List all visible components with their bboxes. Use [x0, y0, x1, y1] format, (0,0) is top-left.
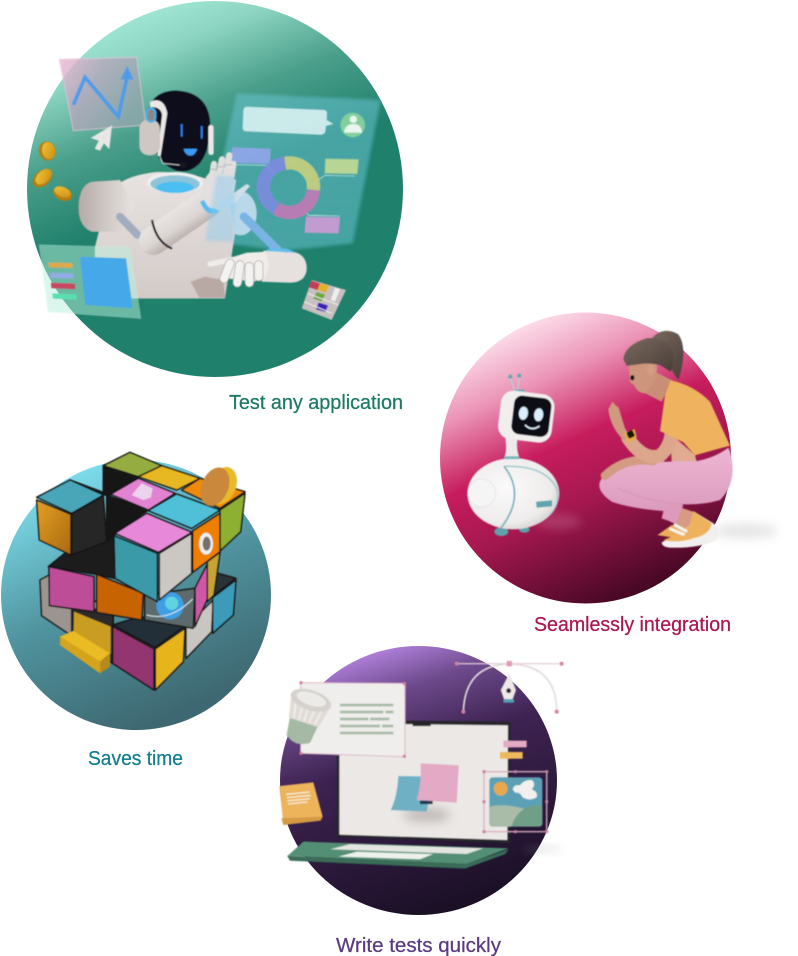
neck: [504, 438, 519, 458]
ponytail: [652, 331, 683, 380]
back shoe: [657, 525, 687, 538]
avatar: [340, 113, 365, 137]
right shoulder: [225, 191, 257, 235]
headset: [139, 100, 214, 168]
circle: write tests quickly: [280, 646, 557, 915]
circle: test any application: [27, 1, 403, 377]
antennae: [508, 374, 525, 392]
icon: orange note: [279, 782, 323, 825]
torso: [94, 172, 235, 298]
icon: coin in slot: [195, 463, 242, 510]
raised forearm: [153, 204, 207, 241]
lower hand: [210, 252, 268, 283]
bottom layer: [40, 572, 236, 690]
illustration: robot meets woman: [467, 331, 778, 548]
caption: test any application: Test any application: [229, 392, 403, 414]
illustration: robot with dashboards: [29, 57, 381, 320]
small robot: [467, 374, 582, 536]
illustration: laptop workspace: [277, 661, 564, 869]
far forearm: [605, 460, 653, 476]
donut chart: [263, 163, 314, 212]
lower leg: [670, 505, 699, 532]
body ball: [467, 458, 559, 529]
laptop screen: [337, 720, 511, 843]
icon: keypad: [302, 280, 346, 320]
head: [497, 389, 556, 444]
lower forearm: [262, 251, 307, 283]
middle layer: [48, 533, 220, 628]
raised hand: [199, 155, 250, 214]
speech bubble: [243, 107, 333, 135]
tag chips: [500, 741, 527, 759]
floor shadow: [712, 523, 778, 539]
translucent panel overlay: [205, 175, 235, 242]
ear: [647, 365, 655, 375]
torso shadow: [191, 277, 225, 298]
shirt: [660, 380, 730, 455]
caption: seamlessly integration: Seamlessly integration: [534, 614, 731, 636]
caption: saves time: Saves time: [88, 748, 183, 770]
hand raised: [608, 402, 630, 440]
label blocks: [231, 147, 359, 233]
illustration: rubik cube: [37, 452, 245, 690]
near arm: [628, 430, 672, 457]
icon: coffee cup: [277, 684, 334, 750]
circle: seamless integration: [440, 312, 731, 604]
icon: planet: [147, 592, 193, 619]
icon: gold coins: [29, 140, 74, 204]
left shoulder: [78, 180, 135, 232]
head: [148, 91, 210, 171]
shadow under notes: [403, 808, 450, 822]
panel: line chart: [59, 57, 146, 131]
hair: [623, 338, 673, 372]
laptop base: [287, 842, 562, 869]
floor shadow: [535, 514, 582, 530]
yellow stair: [60, 612, 111, 673]
wheels: [494, 527, 508, 536]
robot body: [78, 91, 307, 298]
rods: [120, 217, 137, 235]
circle: saves time: [1, 460, 271, 730]
woman: [599, 331, 778, 548]
icon: cursor: [91, 125, 112, 151]
face: [181, 124, 203, 156]
top layer: [37, 452, 245, 602]
panel: dashboard: [205, 93, 381, 251]
icon: ring: [199, 533, 213, 555]
shoe: [662, 511, 719, 548]
neck: [643, 368, 672, 402]
pen tool: [455, 661, 564, 714]
panel: small glass tablet: [39, 245, 141, 318]
chest port: [147, 172, 203, 193]
icon: diamond gem: [132, 483, 153, 500]
text card: [299, 681, 406, 758]
sticky notes: [391, 763, 459, 812]
image placeholder: [482, 770, 548, 833]
belly: [670, 433, 697, 462]
face: [629, 360, 657, 393]
watch: [624, 429, 637, 443]
pants: [599, 448, 733, 523]
